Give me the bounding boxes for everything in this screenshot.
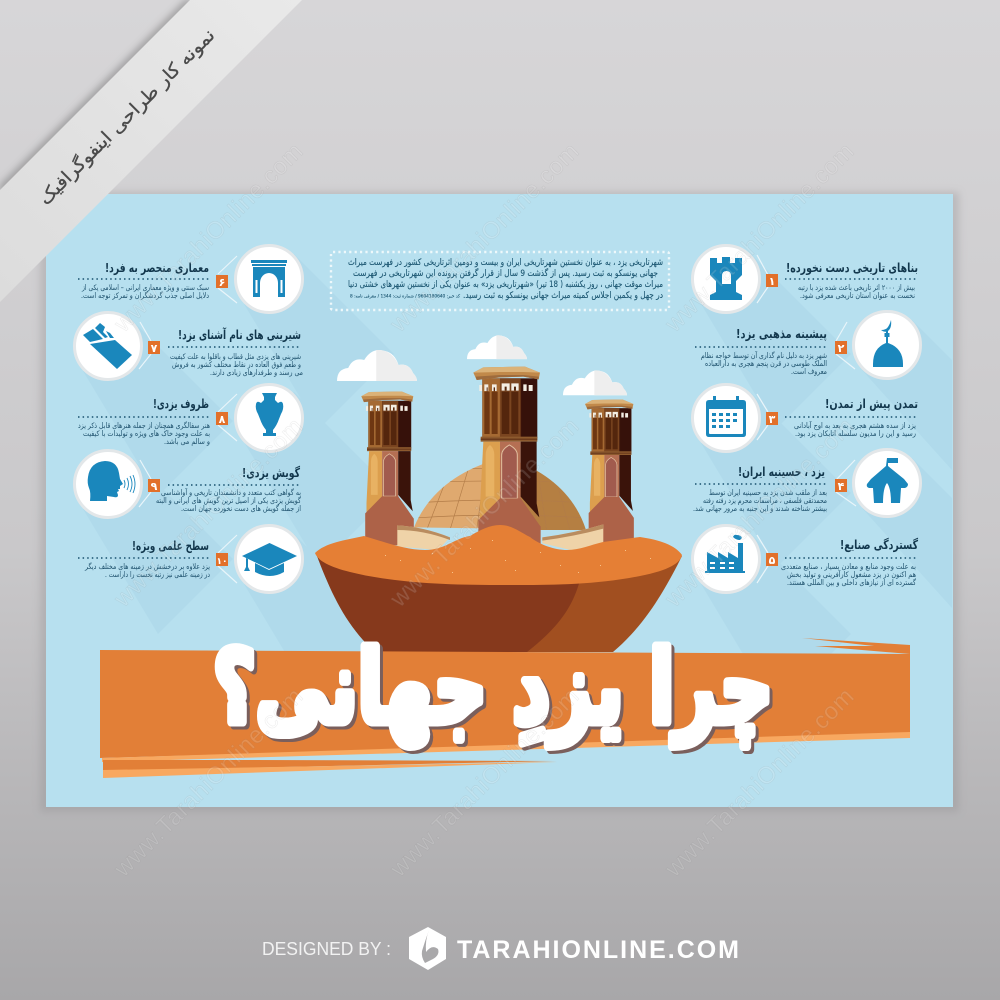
badge 7 — [148, 341, 160, 355]
item 8: pottery — [78, 384, 302, 452]
illustration: clouds — [337, 335, 627, 395]
icon: factory — [692, 526, 760, 592]
sand — [315, 525, 682, 585]
badge 1 — [766, 274, 778, 288]
body 5: هم اکنون در یزد مشغول کارآفرینی و تولید بخش — [787, 569, 916, 579]
heading 2: پیشینه مذهبی یزد! — [736, 326, 827, 341]
logo — [409, 927, 446, 970]
panel: intro text box: میراث موقت جهانی ، روز یکشنبه ( 18 تیر) «شهرتاریخی یزد» به عنوان یکی از نخستین شهرهای خشتی دنیا — [348, 280, 663, 290]
heading 5: گستردگی صنایع! — [840, 537, 919, 552]
item 7: sweets — [74, 312, 303, 380]
sand specks — [385, 540, 651, 573]
badge 6 — [216, 275, 228, 289]
badge 5: ۵ — [769, 554, 776, 567]
icon: tent — [854, 450, 920, 516]
illustration: bowl with dome and wind towers — [315, 367, 682, 652]
item 4: Hosseiniyeh of Iran — [693, 450, 920, 516]
heading 10: سطح علمی ویژه! — [132, 538, 209, 553]
body 2: شهر یزد به دلیل نام گذاری آن توسط خواجه نظام — [701, 350, 827, 360]
body 10: در زمینه علمی نیز رتبه نخست را داراست . — [105, 570, 210, 579]
item 9: dialect — [74, 450, 301, 518]
watermarks: www.TarahiOnline.com — [659, 683, 859, 883]
body 2: معروف است. — [791, 367, 827, 376]
badge 7: ۷ — [151, 342, 158, 355]
long shadows — [83, 254, 952, 709]
panel: intro text box: کد خبر: 9604180640 / شماره ثبت: 1344 / معرفی نامه: 8 — [350, 294, 461, 300]
badge 8: ۸ — [219, 413, 226, 426]
body 4 — [693, 488, 827, 513]
icon: arch — [236, 246, 302, 312]
right wind tower — [585, 399, 634, 543]
body 3: رسید و این را مدیون سلسله اتابکان یزد بود. — [795, 429, 916, 438]
body 8: و سالم می باشد. — [164, 437, 210, 446]
item 2: religious background — [695, 312, 920, 378]
badge 3 — [766, 412, 778, 426]
watermarks — [108, 138, 859, 883]
heading 3: تمدن پیش از تمدن! — [825, 396, 918, 411]
body 2 — [701, 350, 827, 376]
badge 5 — [766, 553, 778, 567]
badge 10: ۱۰ — [216, 557, 228, 567]
icon: vase — [236, 384, 302, 452]
body 6: سبک سنتی و ویژه معماری ایرانی – اسلامی یکی از — [81, 283, 209, 292]
badge 3: ۳ — [769, 413, 776, 426]
body 6 — [81, 283, 209, 300]
body 4: بعد از ملقب شدن یزد به حسینیه ایران توسط — [709, 488, 827, 497]
panel: intro text box — [331, 252, 669, 310]
watermarks: www.TarahiOnline.com — [659, 413, 859, 613]
heading 4: یزد ، حسینیه ایران! — [738, 464, 825, 479]
body 3 — [794, 420, 916, 438]
watermarks: www.TarahiOnline.com — [108, 683, 308, 883]
icon: speaking head — [74, 450, 142, 518]
body 9 — [156, 487, 301, 513]
body 10 — [84, 562, 210, 579]
centre wind tower — [473, 367, 541, 560]
icon: castle — [692, 246, 760, 312]
corner ribbon shadow — [0, 0, 196, 196]
body 2: الملک طوسی در قرن پنجم هجری به دارالعباده — [705, 359, 827, 368]
heading 6: معماری منحصر به فرد! — [105, 260, 209, 275]
dome — [410, 458, 590, 530]
body 4: محمدتقی فلسفی ، مراسمات محرم یزد رفته رفته — [703, 496, 827, 505]
heading 8: ظروف یزدی! — [153, 396, 209, 411]
body 5: به علت وجود منابع و معادن بسیار ، صنایع متعددی — [781, 562, 916, 571]
body 8: به علت وجود خاک های ویژه و تولیدات با کیفیت — [83, 429, 210, 438]
watermarks: www.TarahiOnline.com — [659, 138, 859, 338]
corner ribbon — [0, 0, 302, 302]
icon: calendar — [692, 384, 760, 452]
icon: chocolate bar — [74, 312, 142, 380]
item 3: civilization — [692, 384, 918, 452]
badge 6: ۶ — [219, 276, 225, 289]
body 3: یزد از سده هشتم هجری به بعد به اوج آبادانی — [794, 420, 916, 430]
intro text: شهرتاریخی یزد ، به عنوان نخستین شهرتاریخی ایران و بیست و دومین اثرتاریخی کشور در فهرست میراث — [348, 258, 663, 268]
watermarks: www.TarahiOnline.com — [384, 138, 584, 338]
left wind tower — [361, 392, 414, 545]
heading 9: گویش یزدی! — [242, 465, 301, 480]
badge 9 — [148, 479, 160, 493]
body 7: می رسند و طرفدارهای زیادی دارند. — [210, 368, 303, 377]
icon: mosque dome — [854, 312, 920, 378]
badge 4: ۴ — [838, 480, 845, 493]
item 5: industries — [692, 526, 919, 592]
cream walls — [397, 524, 603, 551]
body 9: از جمله گویش های دست نخورده جهان است. — [181, 504, 301, 513]
badge 9: ۹ — [151, 480, 158, 493]
panel: intro text box: در چهل و یکمین اجلاس کمیته میراث جهانی یونسکو به ثبت رسید. — [463, 291, 663, 301]
badge 8 — [216, 412, 228, 426]
body 7: شیرینی های یزدی مثل قطاب و باقلوا به علت کیفیت — [170, 352, 301, 361]
body 7 — [170, 352, 303, 377]
body 8: هنر سفالگری همچنان از جمله هنرهای قابل ذکر یزد — [78, 421, 210, 430]
footer credit — [262, 927, 739, 970]
site name: TARAHIONLINE.COM — [457, 936, 739, 964]
heading 7: شیرینی های نام آشنای یزد! — [178, 327, 301, 343]
badge 2 — [835, 341, 847, 355]
watermarks: www.TarahiOnline.com — [108, 413, 308, 613]
watermarks: www.TarahiOnline.com — [384, 413, 584, 613]
panel: intro text box: جهانی یونسکو به ثبت رسید. پس از گذشت 9 سال از قرار گرفتن پرونده این شهرتاریخی در فهرست — [353, 267, 658, 279]
body 10: یزد علاوه بر درخشش در زمینه های مختلف دیگر — [84, 562, 210, 571]
designed by label: DESIGNED BY : — [262, 939, 391, 959]
banner — [100, 638, 910, 778]
body 1: بیش از ۲۰۰۰ اثر تاریخی باعث شده یزد با رتبه — [798, 283, 915, 292]
badge 2: ۲ — [838, 342, 845, 355]
infographic card — [46, 194, 953, 807]
badge 4 — [835, 479, 847, 493]
item 1: historic buildings — [692, 246, 918, 312]
body 8 — [78, 421, 210, 446]
body 9: گویش یزدی یکی از اصیل ترین گویش های ایرانی و البته — [156, 496, 301, 505]
body 5 — [781, 562, 916, 587]
card shadow — [40, 192, 959, 812]
icon: graduation cap — [236, 526, 302, 592]
badge 10 — [216, 553, 228, 567]
body 5: گسترده ای از نیازهای داخلی و بین المللی هستند. — [787, 578, 916, 587]
watermarks: www.TarahiOnline.com — [384, 683, 584, 883]
item 6: unique architecture — [78, 246, 302, 312]
heading 1: بناهای تاریخی دست نخورده! — [786, 260, 918, 275]
watermarks: www.TarahiOnline.com — [108, 138, 308, 338]
ribbon text: نمونه کار طراحی اینفوگرافیک — [34, 24, 219, 209]
item 10: scientific level — [78, 526, 302, 592]
title: چرا یزدِ جهانی؟ — [213, 629, 773, 747]
body 6: دلایل اصلی جذب گردشگران و تمرکز توجه است. — [81, 291, 209, 300]
body 1: نخست به عنوان استان تاریخی معرفی شود. — [800, 291, 915, 300]
body 9: به گواهی کتب متعدد و دانشمندان تاریخی و آواشناسی — [161, 487, 301, 497]
body 4: بیشتر شناخته شدند و این جنبه به مرور جهانی شد. — [693, 504, 827, 513]
body 7: و طعم فوق العاده در نقاط مختلف کشور به فروش — [172, 360, 301, 369]
body 1 — [798, 283, 915, 300]
bowl — [317, 556, 682, 652]
badge 1: ۱ — [769, 275, 775, 288]
